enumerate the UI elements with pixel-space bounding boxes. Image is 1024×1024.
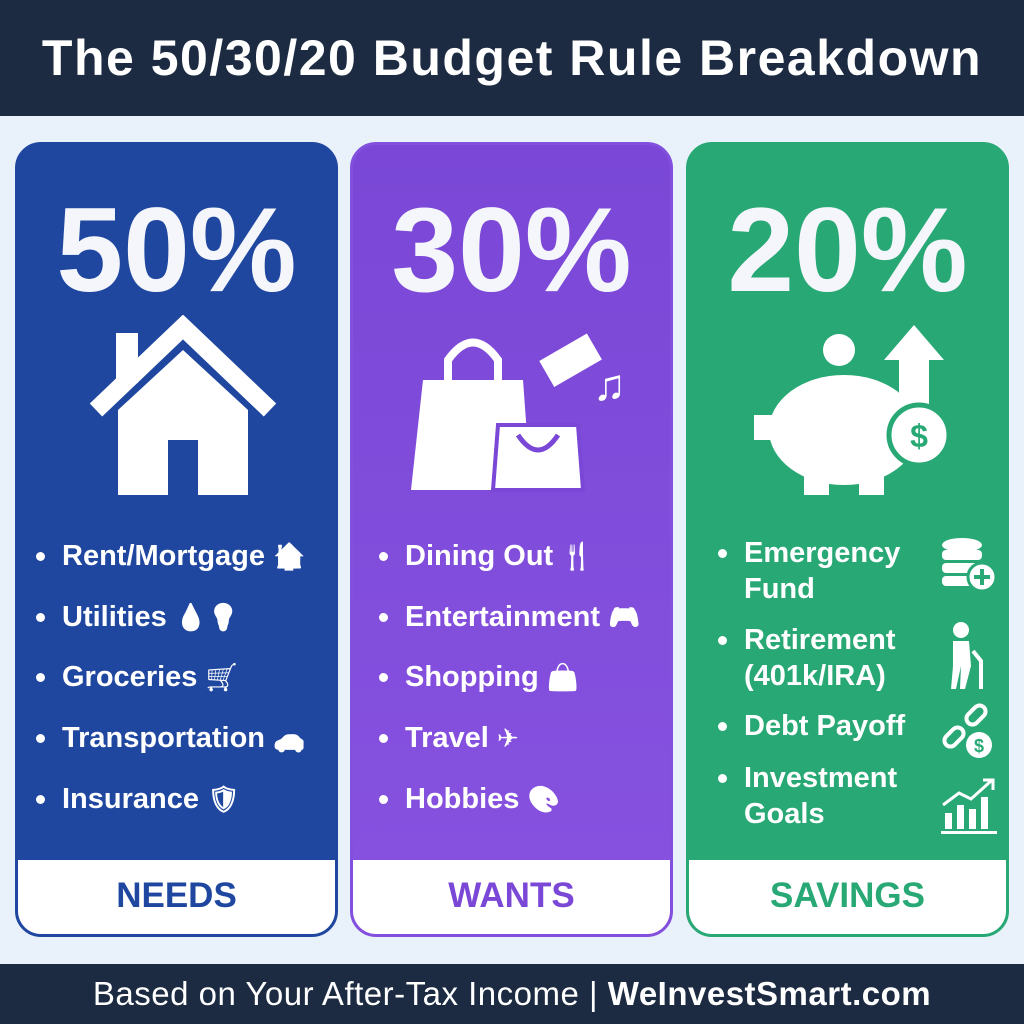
label: needs: NEEDS	[116, 876, 237, 915]
panel: wants	[350, 142, 673, 937]
icon: coins	[942, 538, 994, 590]
label: savings	[689, 860, 1006, 934]
panel: needs	[15, 142, 338, 937]
list: wants items: Travel ✈	[405, 722, 519, 754]
label: wants	[353, 860, 670, 934]
list: savings items: Retirement	[744, 624, 896, 656]
list: savings items: Emergency	[744, 537, 900, 569]
percent 20: 20%	[727, 183, 968, 317]
icon: shopping bags	[411, 334, 626, 490]
icon: piggy bank: $	[910, 418, 928, 454]
footer: Based on Your After-Tax Income | WeInvestSmart.com	[93, 975, 931, 1012]
title	[0, 0, 1024, 116]
icon: growth chart	[941, 778, 997, 834]
title: The 50/30/20 Budget Rule Breakdown	[42, 30, 982, 86]
icon: piggy bank	[754, 325, 946, 495]
percent 30: 30%	[391, 183, 632, 317]
list: wants items: Entertainment 🎮	[405, 601, 640, 633]
list: savings items: (401k/IRA)	[744, 660, 886, 692]
list: needs items: Groceries 🛒	[62, 661, 238, 693]
list: needs items: Transportation 🚗	[62, 722, 305, 754]
icon: broken chain with dollar	[942, 704, 992, 758]
icon: shopping bags: ♫	[593, 361, 626, 410]
list: savings items: Goals	[744, 798, 825, 830]
panel: savings	[686, 142, 1009, 937]
icon: broken chain with dollar: $	[974, 736, 984, 756]
icon: elderly person	[951, 622, 983, 689]
label: wants: WANTS	[448, 876, 575, 915]
list: savings items: Investment	[744, 762, 897, 794]
list: savings items: Debt Payoff	[744, 710, 905, 742]
icon: house	[90, 315, 276, 495]
list: wants items: Hobbies 🎨	[405, 783, 560, 815]
list: needs items	[36, 540, 305, 815]
list: needs items: Insurance 🛡	[62, 783, 240, 815]
footer	[0, 964, 1024, 1024]
list: wants items: Dining Out 🍴	[405, 540, 594, 572]
list: needs items: Rent/Mortgage 🏠	[62, 540, 305, 572]
label: needs	[18, 860, 335, 934]
list: wants items	[379, 540, 640, 815]
percent 50: 50%	[56, 183, 297, 317]
list: needs items: Utilities 💧💡	[62, 601, 240, 633]
list: savings items: Fund	[744, 573, 815, 605]
label: savings: SAVINGS	[770, 876, 925, 915]
list: wants items: Shopping 👜	[405, 661, 579, 693]
list: savings items	[718, 537, 906, 830]
